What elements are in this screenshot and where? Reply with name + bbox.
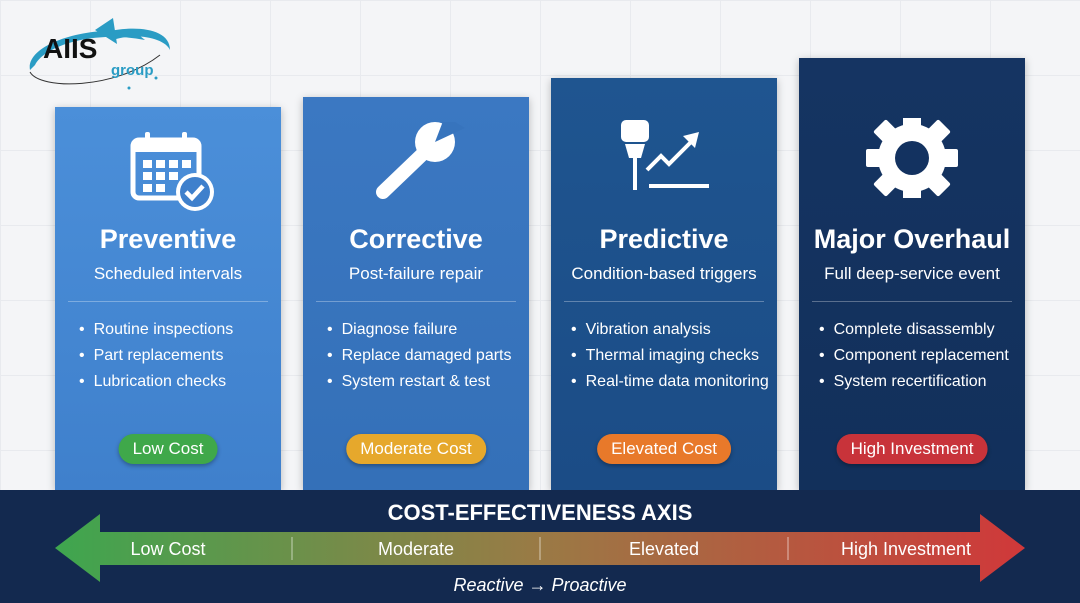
panel: preventive <box>55 107 281 490</box>
badge: moderate cost <box>346 434 486 464</box>
icon: gear <box>866 118 958 198</box>
badge: low cost <box>119 434 217 464</box>
arrow: gradient axis: High Investment <box>841 539 971 559</box>
badge: high investment <box>837 434 987 464</box>
arrow: gradient axis: Reactive → Proactive <box>453 575 627 595</box>
panel: predictive: Thermal imaging checks <box>586 347 759 364</box>
panel: predictive: Condition-based triggers <box>571 264 757 283</box>
panel: preventive: Lubrication checks <box>94 373 226 390</box>
panel: preventive: Routine inspections <box>94 321 233 338</box>
badge: elevated cost <box>597 434 731 464</box>
arrow: gradient axis: Elevated <box>629 539 699 559</box>
panel: preventive: Preventive <box>100 224 236 254</box>
panel: corrective: System restart & test <box>342 373 490 390</box>
logo <box>30 18 170 90</box>
panel: major overhaul <box>799 58 1025 490</box>
panel: corrective: Diagnose failure <box>342 321 457 338</box>
panel: corrective: Replace damaged parts <box>342 347 512 364</box>
icon: wrench <box>376 122 455 199</box>
panel: predictive <box>551 78 777 490</box>
panel: corrective <box>303 97 529 490</box>
panel: predictive: Predictive <box>599 224 729 254</box>
panel: major overhaul: Complete disassembly <box>834 321 995 338</box>
panel: predictive: Real-time data monitoring <box>586 373 769 390</box>
icon: calendar <box>130 132 214 211</box>
panel: corrective: Post-failure repair <box>349 264 483 283</box>
panel: corrective: Corrective <box>349 224 483 254</box>
icon: sensor chart <box>621 120 709 190</box>
logo: AIIS <box>43 33 97 64</box>
bottom band: cost-effectiveness axis <box>0 490 1080 603</box>
panel: major overhaul: System recertification <box>834 373 987 390</box>
axis title: COST-EFFECTIVENESS AXIS <box>388 500 692 525</box>
badge: elevated cost: Elevated Cost <box>611 439 717 458</box>
arrow: gradient axis: Low Cost <box>130 539 206 559</box>
panel: preventive: Part replacements <box>94 347 223 364</box>
panel: major overhaul: Major Overhaul <box>814 224 1010 254</box>
badge: high investment: High Investment <box>851 439 973 458</box>
panel: predictive: Vibration analysis <box>586 321 711 338</box>
arrow: gradient axis: Moderate <box>378 539 454 559</box>
badge: moderate cost: Moderate Cost <box>360 439 472 458</box>
panel: major overhaul: Full deep-service event <box>824 264 1000 283</box>
logo: group <box>111 62 154 79</box>
panel: preventive: Scheduled intervals <box>94 264 242 283</box>
arrow: gradient axis <box>55 514 1025 595</box>
panel: major overhaul: Component replacement <box>834 347 1009 364</box>
badge: low cost: Low Cost <box>133 439 203 458</box>
